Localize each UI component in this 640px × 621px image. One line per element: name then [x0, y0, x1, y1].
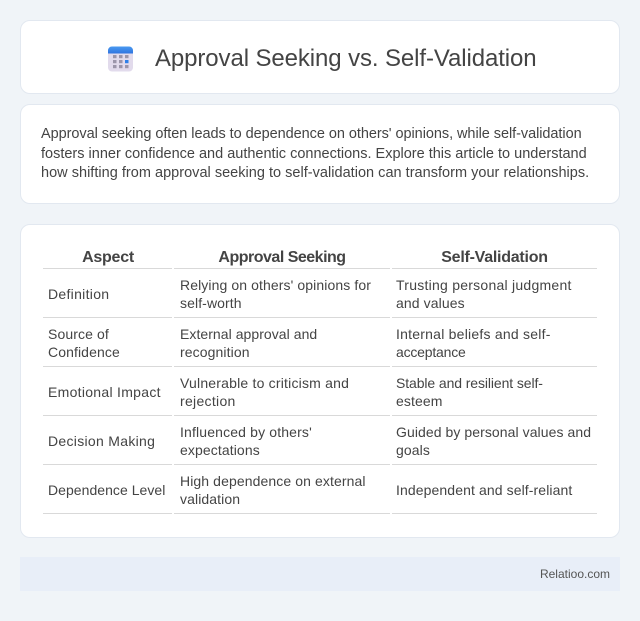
row: Emotional Impact: Vulnerable to criticism and [180, 375, 349, 391]
footer credit: Relatioo.com [540, 567, 610, 581]
table header: Aspect: Aspect [82, 249, 134, 266]
row: Emotional Impact: Emotional Impact [48, 384, 161, 400]
row: Emotional Impact [48, 375, 543, 409]
row: Dependence Level: High dependence on external [180, 473, 366, 489]
panel: title card [20, 20, 620, 94]
row: Source of Confidence: acceptance [396, 344, 466, 360]
row: Source of Confidence: External approval and [180, 326, 317, 342]
row: Decision Making: Influenced by others' [180, 424, 312, 440]
footer bar [20, 557, 620, 591]
row: Source of Confidence: Source of [48, 326, 109, 342]
row: Decision Making: Guided by personal values and [396, 424, 591, 440]
row: Definition: Definition [48, 286, 109, 302]
icon: calendar [108, 46, 133, 72]
row: Definition: Relying on others' opinions for [180, 277, 371, 293]
row: Decision Making: goals [396, 442, 430, 458]
row: Definition: and values [396, 295, 465, 311]
row: Dependence Level: Dependence Level [48, 482, 165, 498]
title: Approval Seeking vs. Self-Validation [155, 45, 537, 72]
row: Source of Confidence [48, 326, 551, 360]
row: Source of Confidence: recognition [180, 344, 250, 360]
row: Dependence Level: Independent and self-reliant [396, 482, 572, 498]
row: Decision Making: Decision Making [48, 433, 155, 449]
row: Source of Confidence: Confidence [48, 344, 120, 360]
row: Emotional Impact: Stable and resilient self- [396, 375, 543, 391]
row: Dependence Level [48, 473, 572, 507]
table header: Self-Validation: Self-Validation [441, 249, 548, 266]
text block: introduction: fosters inner confidence and authentic connections. Explore this article to understand [41, 146, 587, 162]
row: Definition: Trusting personal judgment [396, 277, 572, 293]
panel: introduction [20, 104, 620, 204]
table header: Approval Seeking: Approval Seeking [218, 249, 346, 266]
row: Decision Making: expectations [180, 442, 260, 458]
row: Definition [48, 277, 572, 311]
panel: comparison table [20, 224, 620, 538]
text block: introduction: how shifting from approval seeking to self-validation can transform your relationships. [41, 165, 589, 181]
text block: introduction: Approval seeking often leads to dependence on others' opinions, while self-validation [41, 126, 582, 142]
row: Source of Confidence: Internal beliefs and self- [396, 326, 551, 342]
row: Definition: self-worth [180, 295, 242, 311]
row: Dependence Level: validation [180, 491, 240, 507]
row: Emotional Impact: esteem [396, 393, 443, 409]
row: Decision Making [48, 424, 591, 458]
text block: introduction [41, 126, 589, 181]
row: Emotional Impact: rejection [180, 393, 236, 409]
